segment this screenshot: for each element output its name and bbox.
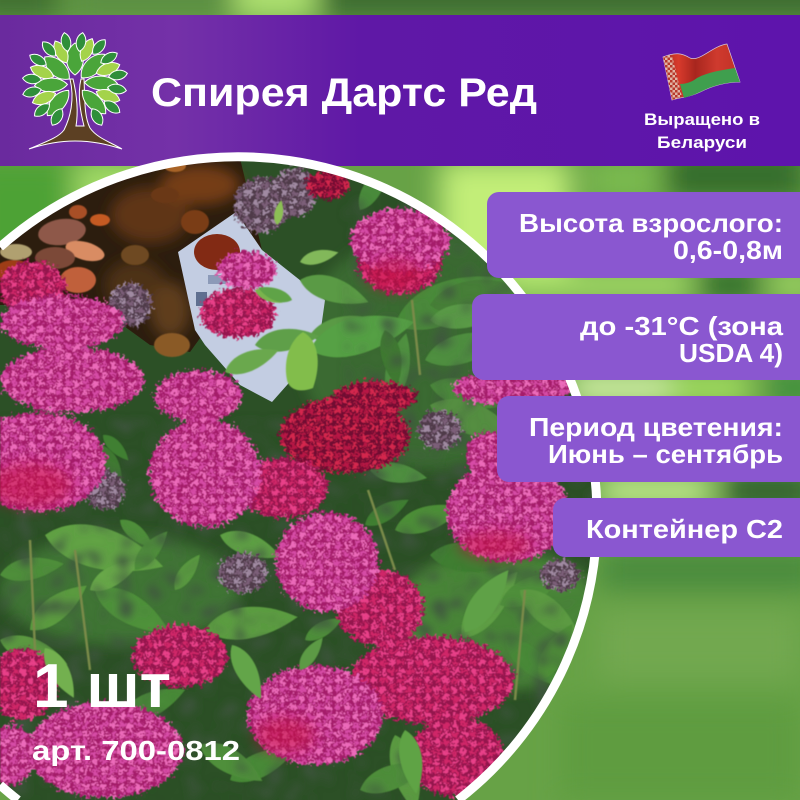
header band — [0, 15, 800, 166]
dark foliage base — [0, 150, 620, 800]
title: Спирея Дартс Ред — [151, 71, 537, 115]
info box: flowering period — [497, 396, 800, 482]
tree leaves — [22, 32, 128, 128]
info box: height: Высота взрослого: — [519, 208, 783, 238]
red flower clusters — [280, 171, 417, 473]
mauve flower buds — [85, 167, 580, 593]
info box: frost hardiness: до -31°C (зона — [580, 311, 784, 341]
quantity label: 1 шт — [33, 652, 171, 721]
info box: container — [553, 498, 800, 557]
info box: container: Контейнер С2 — [586, 514, 783, 544]
grown in Belarus caption — [644, 110, 760, 152]
info box: flowering period: Период цветения: — [529, 412, 783, 442]
info box: flowering period: Июнь – сентябрь — [548, 439, 783, 469]
info box: height: 0,6-0,8м — [673, 235, 783, 265]
article number: арт. 700-0812 — [32, 735, 240, 766]
info box: height — [487, 192, 800, 278]
red tint on flower centres — [0, 259, 531, 753]
logo: tree — [22, 32, 128, 149]
rose flower clusters — [0, 230, 514, 797]
white plant label behind leaves — [178, 212, 325, 402]
info box: frost hardiness: USDA 4) — [679, 338, 783, 368]
white round frame — [0, 157, 597, 800]
brown autumn foliage top left — [0, 150, 262, 357]
grown in Belarus caption: Беларуси — [657, 133, 747, 152]
photo: spirea shrub in a round frame — [0, 150, 620, 800]
tree trunk and roots — [29, 79, 122, 149]
green leaves — [0, 159, 590, 800]
grown in Belarus caption: Выращено в — [644, 110, 760, 129]
icon: Belarus flag — [663, 44, 740, 100]
pink flower clusters — [0, 208, 573, 798]
foreground leaves — [37, 199, 518, 796]
dark gaps between leaves — [0, 200, 620, 800]
info box: frost hardiness — [472, 294, 800, 380]
stems — [30, 300, 525, 700]
